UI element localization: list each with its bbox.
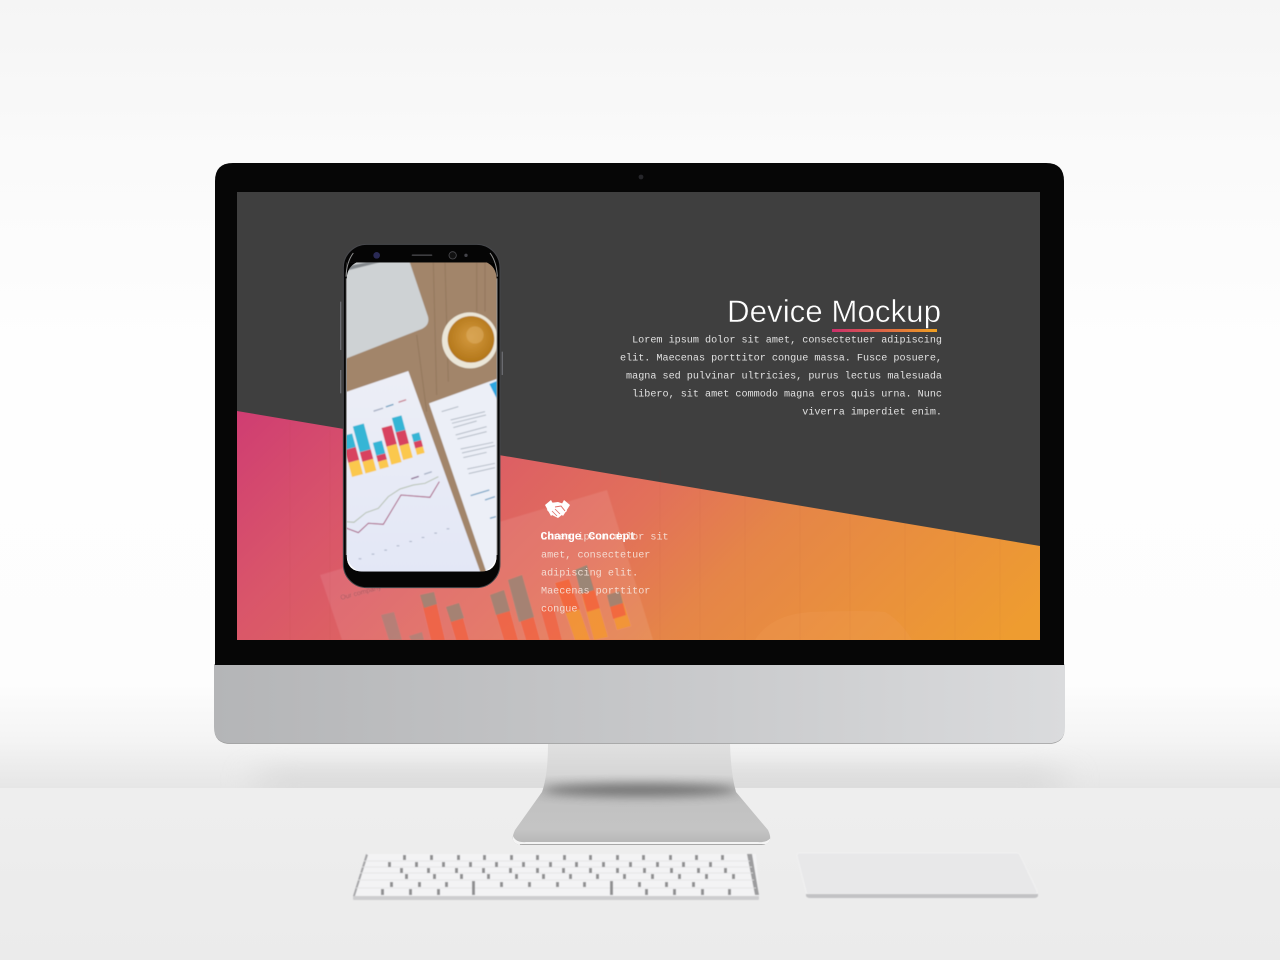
trackpad xyxy=(797,853,1038,898)
feature body text: Maecenas porttitor xyxy=(541,586,650,598)
laptop xyxy=(345,261,428,359)
screen corner shapes xyxy=(347,262,357,278)
keyboard key gaps xyxy=(381,855,735,895)
background: desk xyxy=(0,788,1280,960)
line chart xyxy=(345,477,439,533)
trackpad front edge xyxy=(806,894,1038,898)
feature body text: congue xyxy=(541,604,577,616)
gradient diagonal band xyxy=(237,411,1040,640)
monitor outer edge xyxy=(214,162,1065,670)
feature text: overlapping heading and body xyxy=(540,532,669,616)
description paragraph: viverra imperdiet enim. xyxy=(802,406,942,418)
description paragraph: Lorem ipsum dolor sit amet, consectetuer adipiscing xyxy=(632,334,942,346)
phone camera and speaker xyxy=(373,252,468,259)
keyboard row lines xyxy=(356,861,756,888)
monitor chin xyxy=(214,664,1065,744)
trackpad surface xyxy=(797,853,1037,894)
wood desk xyxy=(345,261,498,574)
phone side buttons xyxy=(340,302,503,393)
monitor shadow on wall xyxy=(270,767,1050,788)
feature body text xyxy=(541,532,669,616)
phone body xyxy=(343,244,500,588)
report paper with charts xyxy=(341,371,481,573)
faded chart paper watermark xyxy=(320,490,653,640)
chart legends and axis ticks xyxy=(359,399,449,559)
wood grain lines xyxy=(417,262,485,412)
webcam xyxy=(639,175,643,179)
keyboard xyxy=(353,854,759,900)
feature body text: amet, consectetuer xyxy=(541,550,650,562)
bar chart xyxy=(341,415,425,477)
feature heading: Change Concept xyxy=(540,532,636,544)
dark slide background xyxy=(237,192,1040,546)
feature body text: Lorem ipsum dolor sit xyxy=(541,532,669,544)
slide screen xyxy=(237,192,1040,640)
wood grain overlay xyxy=(290,420,1000,640)
description paragraph xyxy=(620,334,942,418)
coffee cup xyxy=(442,312,498,368)
title: Device Mockup xyxy=(727,294,941,329)
feature body text: adipiscing elit. xyxy=(541,568,638,580)
watermark hand shape xyxy=(755,611,912,640)
description paragraph: elit. Maecenas porttitor congue massa. Fusce posuere, xyxy=(620,352,942,364)
description paragraph: magna sed pulvinar ultricies, purus lectus malesuada xyxy=(626,370,942,382)
monitor stand xyxy=(505,744,780,846)
title underline xyxy=(832,329,937,332)
phone glass highlights xyxy=(346,253,497,555)
icon: handshake xyxy=(545,500,570,518)
watermark caption: Our company xyxy=(340,584,383,602)
second report paper xyxy=(429,378,498,573)
monitor bezel xyxy=(215,163,1064,665)
description paragraph: libero, sit amet commodo magna eros quis urna. Nunc xyxy=(632,388,942,400)
phone screen photo xyxy=(341,261,498,574)
monitor body xyxy=(214,162,1065,744)
smartphone mockup xyxy=(340,244,503,588)
keyboard body xyxy=(353,854,759,896)
